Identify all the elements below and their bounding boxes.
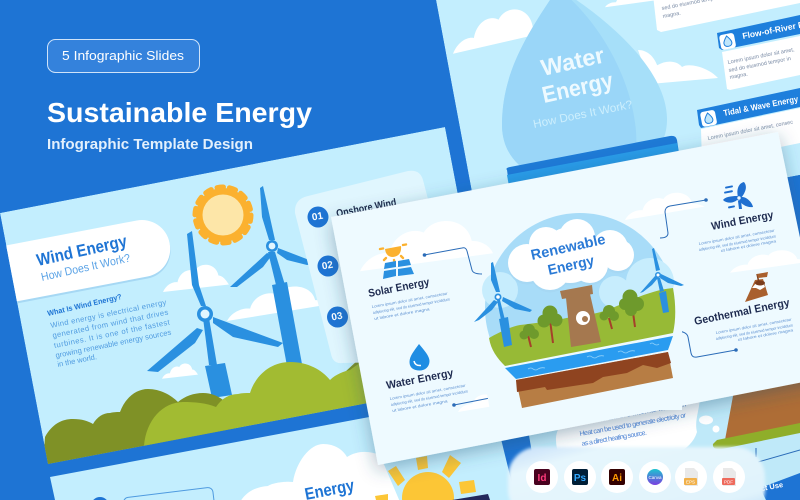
water layer [505,336,673,379]
globe lower cover [478,318,682,410]
label: Solar Energy: Solar Energy [367,276,431,300]
icon: Photoshop [564,461,596,493]
hills: dark green [44,389,235,464]
icon: Canva [639,461,671,493]
text: What is Wind Energy: in the world. [57,352,98,369]
card body [728,48,794,79]
card: Tidal and Wave Energy [697,88,800,147]
land [489,288,675,366]
hills: back right dark green [346,362,359,372]
icon: Canva: Canva [648,475,662,480]
cloud: left [453,9,533,54]
cloud: top [605,0,655,7]
dark roof [452,494,490,500]
icon: EPS file [675,461,707,493]
cloud: Renewable Energy [508,219,634,290]
text: solar body: ut labore et dolore magna [374,306,431,321]
white heading pill [6,220,170,304]
wind turbine: front [147,231,283,398]
card body: magna. [729,71,749,81]
icon: PDF file: PDF [724,480,733,484]
soil [516,352,673,408]
heading: Water Energy: Energy [539,67,616,108]
number 03: 03 [331,311,344,323]
toolbar: software icons [508,447,765,500]
ground: brown [725,370,800,440]
text: solar body [371,291,451,321]
panel: geothermal slide [523,330,800,500]
illustration: renewable energy globe [474,213,684,410]
cloud: solar backdrop [360,221,493,271]
text: solar body: adipiscing elit, sed do eiusmod tempor incididunt [372,296,451,315]
subheading: How Does It Work?: How Does It Work? [40,253,131,284]
text: water body: ut labore et dolore magna [392,398,449,413]
cloud with text [556,395,700,471]
number badge [91,497,109,500]
button: Direct Use [746,473,800,500]
label: Wind Energy: Wind Energy [710,209,775,233]
card: top text [653,0,800,32]
subtitle: Infographic Template Design [47,136,253,153]
text: solar body: Lorem ipsum dolor sit amet, consectetur [371,291,449,309]
icon: Photoshop: Ps [574,473,587,484]
icon: geothermal mountain [745,272,768,302]
text: What is Wind Energy: growing renewable energy sources [55,328,172,360]
cloud: right [638,50,718,84]
heading: Wind Energy: Wind Energy [35,231,129,270]
title: Sustainable Energy [47,97,312,128]
badge: 5 Infographic Slides: 5 Infographic Slides [62,48,185,63]
icon: solar panel [380,244,414,279]
icon: InDesign [526,461,558,493]
blue strip: right edge [780,175,800,240]
cloud: small upper [163,265,229,292]
icon: EPS file: EPS [686,480,695,484]
tower [560,285,601,347]
card body: Lorem ipsum dolor sit amet, consec [707,119,794,142]
bubbles [699,416,720,432]
label: Geothermal Energy: Geothermal Energy [693,297,791,328]
connector line [756,448,800,462]
text block: as a direct heating source. [581,430,647,448]
number 01 [308,206,328,228]
blue strip: between slides [504,432,534,500]
sun [375,455,476,500]
water ripples [528,343,659,370]
text: wind body: adipiscing elit, sed do eiusmod tempor incididunt [698,233,777,252]
panel: renewable energy slide [331,132,800,465]
sky clouds [482,258,674,308]
heading: Water Energy: Water [538,42,607,81]
text block: Heat can be used to generate electricity or [579,412,687,438]
item: Onshore Wind: Onshore Wind [335,197,397,220]
heading: Renewable: Renewable [529,232,607,264]
panel: sun slide [50,394,516,500]
connector: wind [660,198,708,238]
wind turbine: back [230,186,308,364]
text: geothermal body: adipiscing elit, sed do eiusmod tempor incididunt [715,322,794,341]
wind turbine: left [474,262,532,347]
icon: water drop [410,344,430,370]
outlined item [123,487,215,500]
heading: Energy: Energy [546,253,596,279]
connector: water [452,367,500,407]
text: geothermal body: Lorem ipsum dolor sit amet, consectetur [715,317,793,335]
sun [195,187,251,243]
wind turbine: right [640,248,684,313]
panel: water energy slide [436,0,800,190]
cloud: geothermal backdrop [730,250,800,273]
label: Water Energy: Water Energy [385,367,455,392]
connector: geothermal [678,331,738,357]
text block: from the Earth's internal heat can [579,401,687,427]
text: water body: Lorem ipsum dolor sit amet, consectetur [389,383,467,401]
text: What is Wind Energy: turbines. It is one of the fastest [53,317,171,350]
card: Flow-of-River [717,15,800,90]
trees [520,290,644,347]
button: Direct Use: Direct Use [746,480,784,496]
cloud: small lower [162,364,198,379]
cloud with heading [240,444,400,500]
text: What is Wind Energy: generated from wind that drives [52,308,169,340]
icon: Illustrator: Ai [612,473,622,484]
panel: numbered list [295,171,470,363]
text: water body [389,383,469,413]
soil dark layer [516,352,671,392]
text: geothermal body: ut labore et dolore magna [737,327,794,342]
badge: 5 Infographic Slides [48,40,200,72]
icon: InDesign: Id [538,473,546,484]
connector: solar [423,248,482,274]
water drop [502,0,667,166]
text: What is Wind Energy [46,292,172,369]
text: wind body: ut labore et dolore magna [720,238,777,253]
hills: light green [144,362,372,446]
card body: Lorem ipsum dolor sit amet, [727,47,795,66]
icon: Illustrator [601,461,633,493]
ground: green [713,423,800,449]
text: water body: adipiscing elit, sed do eiusmod tempor incididunt [390,388,469,407]
text: wind body: Lorem ipsum dolor sit amet, consectetur [698,228,776,246]
text: What is Wind Energy: Wind energy is electrical energy [50,298,167,330]
subheading: How Does It Work?: How Does It Work? [532,99,634,131]
drop base bar [506,136,679,184]
icon: PDF file [713,461,745,493]
text: What is Wind Energy: What Is Wind Energy? [46,292,123,318]
cloud: wind backdrop [625,193,705,220]
icon: wind turbine [723,182,753,209]
panel: wind energy slide [0,127,490,476]
number 01: 01 [311,211,324,223]
heading: Water Energy [540,50,612,103]
cloud: large middle [227,286,319,321]
globe sky [485,213,675,403]
icon: drop badge [719,33,736,50]
number 03 [327,306,348,328]
card: top text: magna. [662,10,682,20]
card body: sed do eiusmod tempor in [728,56,792,74]
icon: drop badge [700,110,717,127]
cloud: water backdrop [458,390,523,412]
number 02: 02 [321,260,334,272]
text block [579,401,687,448]
number 02 [318,256,338,276]
